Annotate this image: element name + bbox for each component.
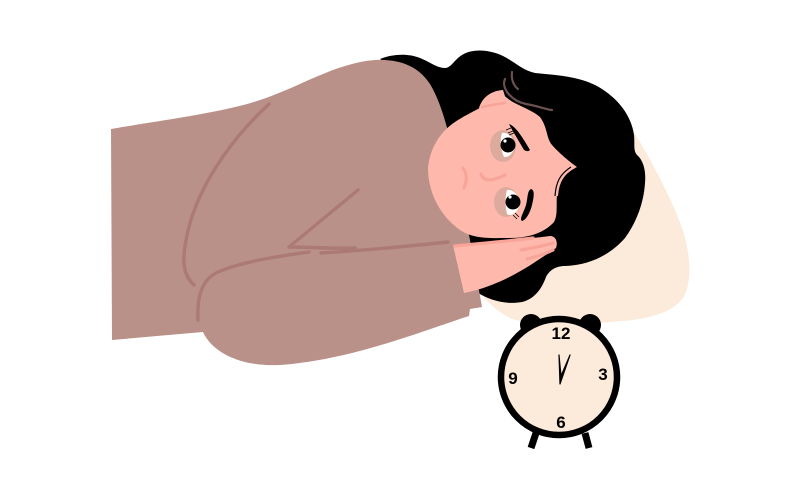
ear line [482,103,505,107]
under-eye shadows [490,130,516,162]
sweater body [111,60,482,365]
hair strand on forehead [504,79,552,110]
clock numbers: 3 [598,365,608,384]
clock numbers: 9 [508,369,518,388]
hair edge highlight [557,167,575,196]
clock hands [559,355,570,384]
nose [481,174,505,180]
hand [453,236,557,293]
clock numbers [508,324,608,432]
upper eye [501,133,515,157]
clock bells [520,314,542,336]
eyelashes [506,128,519,219]
mouth [463,168,466,188]
lower eye [506,190,520,215]
sweater fold lines [184,104,448,320]
ear [479,90,510,115]
pillow [478,122,689,324]
clock legs [531,433,589,448]
eyebrows [509,124,530,151]
face [428,72,577,238]
head [428,94,577,238]
clock numbers: 12 [552,324,570,343]
alarm clock [501,314,617,448]
clock face [501,319,617,435]
clock numbers: 6 [556,413,566,432]
hair [380,51,645,303]
